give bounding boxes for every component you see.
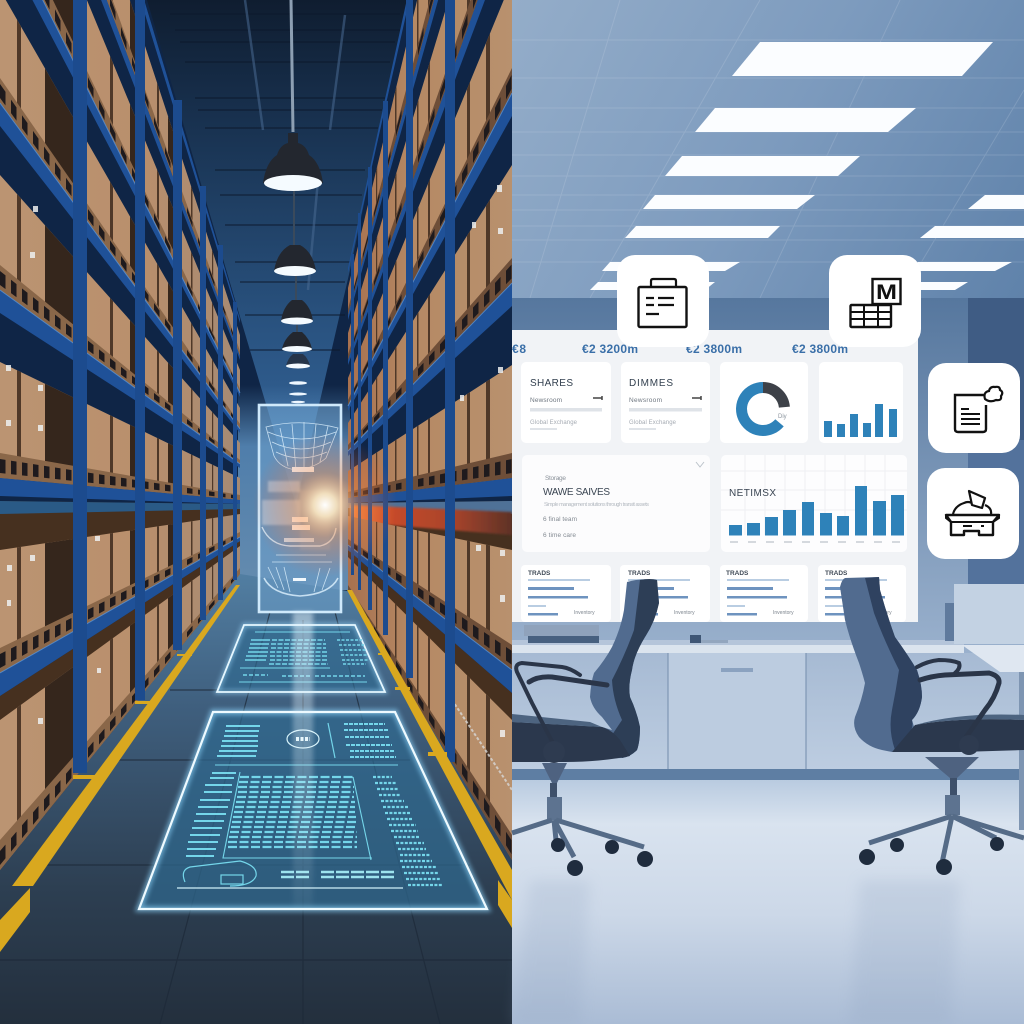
card: dimmers: Newsroom (629, 397, 662, 404)
bottom task cards: TRADS (825, 570, 848, 577)
left rack boxes (0, 0, 240, 900)
icon: spreadsheet with M (829, 255, 921, 347)
office ceiling (512, 0, 1024, 300)
card: wave saves: 6 time care (543, 532, 576, 539)
card: donut chart (720, 362, 808, 443)
left pallets (0, 0, 240, 870)
card: dimmers: DIMMES (629, 378, 673, 389)
top currency figures: €2 3200m (582, 342, 638, 356)
light flare (258, 437, 394, 573)
bottom task cards: TRADS (628, 570, 651, 577)
top currency figures (512, 342, 848, 356)
bottom task cards: Inventory (871, 610, 892, 616)
back wall (512, 298, 1024, 656)
card: shares (521, 362, 611, 443)
large floor data panel (139, 712, 487, 909)
yellow floor lines (0, 585, 512, 952)
vertical light beam (293, 612, 313, 907)
lower shelf backing (0, 501, 512, 870)
icon: filled tray (927, 468, 1019, 559)
card: metrics bar chart: NETIMSX (729, 488, 776, 499)
card: dimmers (621, 362, 710, 443)
card: wave saves: 6 final team (543, 516, 577, 523)
card: wave saves: Simple management solutions through transit assets (544, 502, 649, 508)
card: wave saves: Storage (545, 475, 566, 482)
left office chair (512, 579, 659, 876)
cabinets and counter (512, 584, 1024, 830)
far aisle haze (238, 385, 350, 590)
floor (0, 574, 512, 1024)
rack beams (0, 0, 512, 696)
bottom task cards (521, 565, 906, 622)
right rack boxes (348, 0, 512, 900)
card: wave saves (522, 455, 710, 552)
right office chair (840, 577, 1024, 875)
hologram scanner frame (259, 405, 341, 612)
icon: spreadsheet with M: M (876, 281, 897, 304)
ceiling (147, 0, 407, 505)
top currency figures: €2 3800m (792, 342, 848, 356)
panel: modern office (512, 0, 1024, 1024)
icon: briefcase (617, 255, 709, 347)
ceiling grid (512, 0, 1024, 298)
panel: warehouse aisle (0, 0, 512, 1024)
floor tile joints (0, 612, 512, 1024)
card: metrics bar chart (721, 455, 907, 552)
office floor (512, 780, 1024, 1024)
right pallets (348, 0, 512, 860)
card: wave saves: WAWE SAIVES (543, 487, 610, 498)
bottom task cards: Inventory (574, 610, 595, 616)
top currency figures: €2 3800m (686, 342, 742, 356)
card: dimmers: Global Exchange (629, 420, 677, 426)
card: small bar chart (819, 362, 903, 443)
bottom task cards: TRADS (726, 570, 749, 577)
card: shares: SHARES (530, 378, 573, 389)
icon: document with splash (928, 363, 1020, 453)
card: shares: Global Exchange (530, 420, 578, 426)
card: donut chart: Diy (778, 414, 787, 420)
dashboard screen (512, 255, 1024, 876)
ceiling lights (590, 42, 1024, 290)
bottom task cards: Inventory (674, 610, 695, 616)
ceiling lamps (263, 0, 323, 403)
small floor data panel (217, 625, 385, 692)
top currency figures: €8 (512, 342, 526, 356)
rack uprights (73, 0, 455, 773)
bottom task cards: Inventory (773, 610, 794, 616)
bottom task cards: TRADS (528, 570, 551, 577)
card: shares: Newsroom (530, 397, 562, 404)
